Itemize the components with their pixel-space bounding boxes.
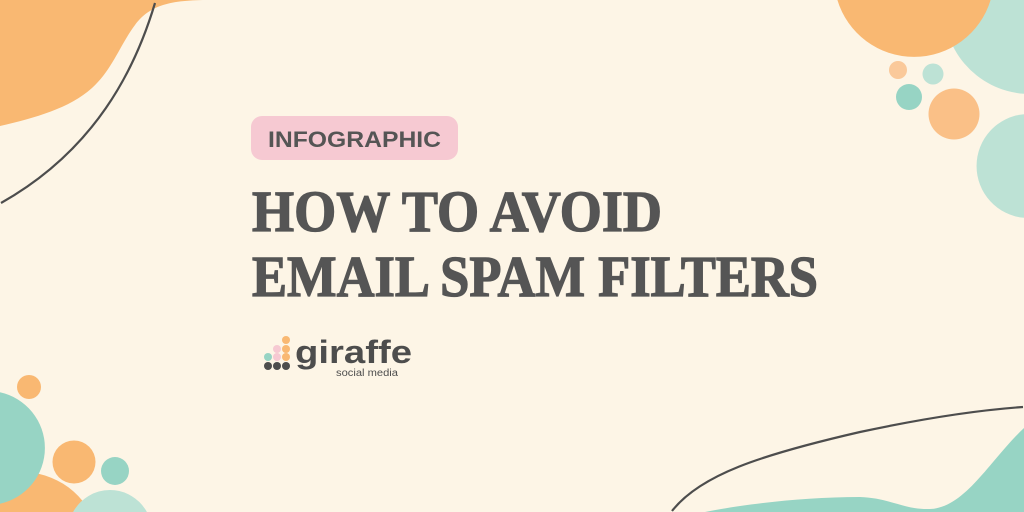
icon: dot grid [264, 336, 290, 370]
title: EMAIL SPAM FILTERS [252, 244, 818, 309]
circles: bottom-left cluster [0, 375, 147, 512]
title [252, 179, 818, 309]
curve line: top-left [1, 3, 155, 203]
blob: bottom-right teal [705, 428, 1024, 512]
logo: giraffe social media: giraffe [295, 334, 412, 370]
title: HOW TO AVOID [252, 179, 662, 244]
curve line: bottom-right [672, 407, 1023, 511]
logo: giraffe social media: social media [336, 368, 398, 379]
logo: giraffe social media [264, 334, 412, 379]
circles: top-right cluster [837, 0, 1024, 218]
tag: INFOGRAPHIC [251, 116, 458, 160]
tag: INFOGRAPHIC: INFOGRAPHIC [268, 127, 441, 152]
blob: top-left orange [0, 0, 210, 126]
